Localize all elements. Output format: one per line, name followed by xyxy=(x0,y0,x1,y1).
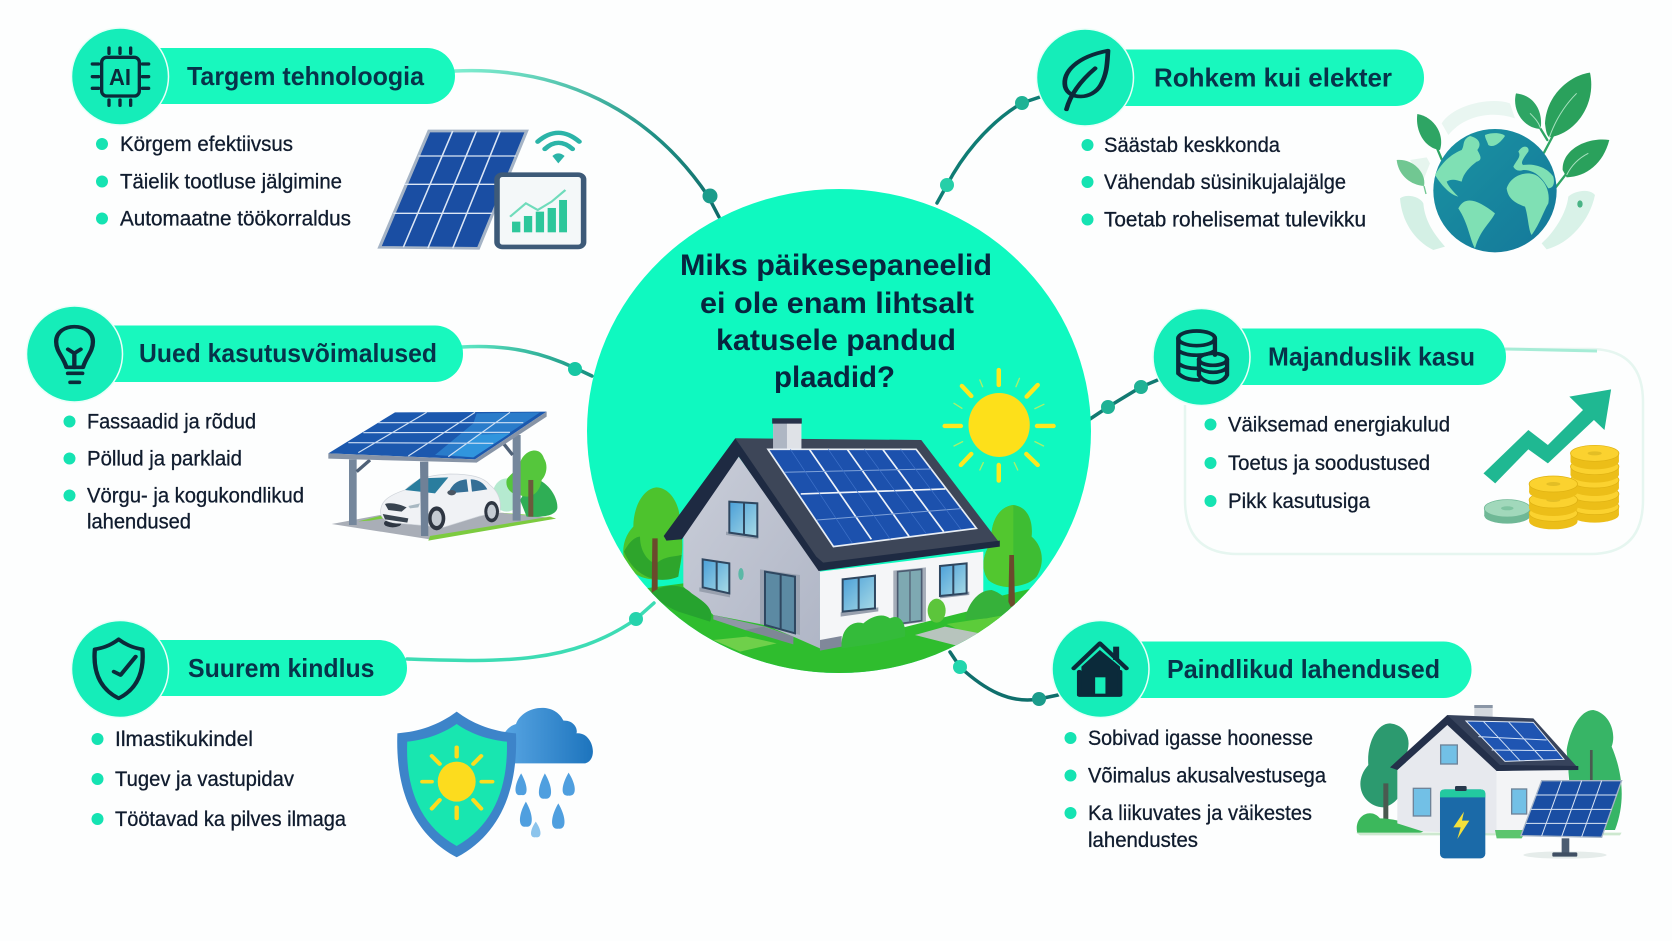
bushes xyxy=(652,586,1011,648)
heading pill xyxy=(72,620,407,718)
illustration: globe with leaves xyxy=(1397,73,1609,252)
bullet list: Fassaadid ja rõdud xyxy=(87,410,256,434)
ground and trees xyxy=(623,487,1042,680)
panel: Suurem kindlus xyxy=(72,620,593,857)
top accent line xyxy=(1505,349,1597,351)
heading pill xyxy=(1052,620,1472,718)
windows and doors xyxy=(699,502,969,635)
heading pill xyxy=(1153,308,1506,406)
bullet list: Sobivad igasse hoonesse xyxy=(1088,727,1313,750)
bullet list: Pikk kasutusiga xyxy=(1228,490,1370,513)
bullet list: Toetus ja soodustused xyxy=(1228,452,1430,475)
heading pill xyxy=(72,28,455,125)
central heading: ei ole enam lihtsalt xyxy=(700,287,974,320)
connector: Majanduslik kasu xyxy=(1090,379,1160,419)
central circle xyxy=(587,189,1091,680)
central heading: Miks päikesepaneelid xyxy=(680,249,992,282)
panel: Majanduslik kasu xyxy=(1153,308,1643,554)
panel: Paindlikud lahendused xyxy=(1052,620,1622,859)
bullet list: Automaatne töökorraldus xyxy=(120,208,351,230)
bullet list: lahendustes xyxy=(1088,829,1198,852)
illustration: solar panel and tablet xyxy=(380,131,584,248)
panel: Targem tehnoloogia xyxy=(72,28,584,248)
connector: Uued kasutusvõimalused xyxy=(462,346,592,376)
connector: Paindlikud lahendused xyxy=(950,652,1058,706)
bullet list: Väiksemad energiakulud xyxy=(1228,414,1450,436)
icon: coin stack xyxy=(1178,331,1227,382)
heading pill: Majanduslik kasu xyxy=(1268,342,1475,372)
central heading xyxy=(680,249,992,394)
bullet list: Säästab keskkonda xyxy=(1104,134,1280,157)
bullet list xyxy=(64,410,304,534)
connector: Rohkem kui elekter xyxy=(937,96,1043,203)
heading pill xyxy=(1036,29,1424,126)
bullet list: Ilmastikukindel xyxy=(115,728,253,751)
connector: Targem tehnoloogia xyxy=(455,71,719,217)
central heading: plaadid? xyxy=(774,361,895,394)
rounded panel outline xyxy=(1185,349,1643,554)
heading pill: Rohkem kui elekter xyxy=(1154,62,1392,92)
central heading: katusele pandud xyxy=(716,324,956,357)
icon text: AI: AI xyxy=(109,64,131,90)
bullet list: Vörgu- ja kogukondlikud xyxy=(87,484,304,508)
walls xyxy=(683,457,983,651)
heading pill: Paindlikud lahendused xyxy=(1167,654,1440,684)
bullet list: Täielik tootluse jälgimine xyxy=(120,170,342,194)
bullet list xyxy=(1204,414,1450,513)
icon: leaf xyxy=(1065,51,1108,109)
illustration: growth arrow and coins xyxy=(1483,389,1619,529)
bullet list: Võimalus akusalvestusega xyxy=(1088,764,1326,788)
panel: Uued kasutusvõimalused xyxy=(26,306,557,541)
bullet list xyxy=(1064,727,1326,852)
bullet list xyxy=(96,133,351,230)
illustration: shield with sun and rain xyxy=(397,708,593,857)
icon: sun xyxy=(945,370,1054,481)
bullet list: Toetab rohelisemat tulevikku xyxy=(1104,208,1366,232)
illustration: house with solar panels xyxy=(623,418,1042,680)
icon: AI chip xyxy=(92,48,149,105)
solar array xyxy=(768,449,976,547)
icon: shield check xyxy=(95,639,143,698)
bullet list: Vähendab süsinikujalajälge xyxy=(1104,171,1346,194)
illustration: house with battery and panel xyxy=(1356,705,1622,859)
bullet list: Pöllud ja parklaid xyxy=(87,448,242,470)
chimney xyxy=(772,418,802,449)
panel: Rohkem kui elekter xyxy=(1036,29,1609,252)
illustration: solar carport with car xyxy=(328,412,557,541)
connector: Suurem kindlus xyxy=(407,603,654,660)
heading pill: Targem tehnoloogia xyxy=(187,61,425,91)
heading pill xyxy=(26,306,463,402)
roof xyxy=(664,418,1000,571)
icon: house xyxy=(1074,643,1126,695)
icon: light bulb xyxy=(56,327,93,382)
bullet list xyxy=(92,728,346,831)
bullet list xyxy=(1082,134,1366,232)
bullet list: Körgem efektiivsus xyxy=(120,133,293,156)
heading pill: Suurem kindlus xyxy=(188,653,374,683)
heading pill: Uued kasutusvõimalused xyxy=(139,338,437,368)
bullet list: Ka liikuvates ja väikestes xyxy=(1088,802,1312,825)
bullet list: Töötavad ka pilves ilmaga xyxy=(115,808,346,831)
bullet list: lahendused xyxy=(87,510,191,534)
bullet list: Tugev ja vastupidav xyxy=(115,768,294,791)
